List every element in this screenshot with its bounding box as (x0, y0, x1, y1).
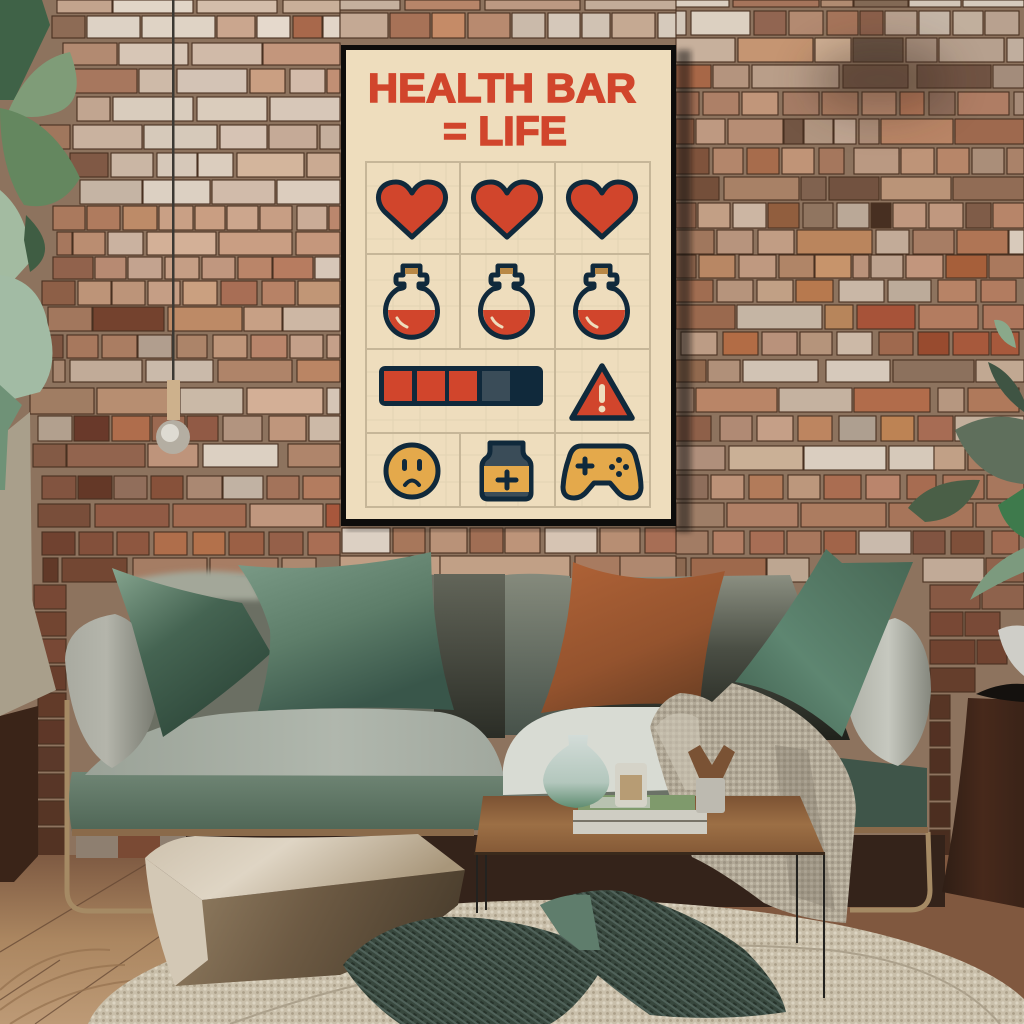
right wooden side table (942, 684, 1024, 908)
left arm (65, 614, 157, 768)
sofa frame (67, 700, 930, 911)
left wooden panel (0, 706, 38, 882)
title (368, 65, 636, 154)
pillow: green large (238, 552, 454, 711)
sofa rail (72, 829, 474, 836)
dark knit floor pillows (343, 890, 786, 1024)
floor (0, 850, 1024, 1024)
back cushions (130, 573, 440, 735)
right arm (846, 618, 931, 766)
icon: heart 2 (473, 182, 541, 237)
vase (543, 735, 609, 808)
round woven rug (88, 900, 1024, 1024)
hanging pendant lamp (156, 0, 190, 454)
pillow: dark green left (112, 568, 271, 737)
poster paper (346, 50, 671, 519)
coffee table (474, 796, 825, 998)
health bar (379, 366, 543, 406)
icon: potion 2 (481, 266, 532, 337)
left seat base (69, 772, 503, 832)
icon: potion 3 (576, 266, 628, 337)
icon: game controller (563, 446, 641, 498)
icon: sad face (386, 445, 438, 497)
knit throw blanket (650, 683, 856, 923)
left plant leaves (0, 0, 80, 490)
right plant (908, 320, 1024, 676)
left curtain (0, 412, 56, 716)
decor on table (543, 735, 735, 834)
icon: medicine bottle (482, 443, 531, 499)
under-sofa shadow (76, 835, 945, 907)
cup with sticks (688, 745, 735, 780)
title: = LIFE (443, 108, 567, 154)
icon grid (366, 162, 650, 507)
icon: warning triangle (572, 366, 632, 418)
candle (615, 763, 647, 807)
icon: potion 1 (386, 266, 438, 337)
pillow: rust brown (541, 562, 725, 713)
right seat cushion (503, 707, 675, 795)
books (573, 810, 707, 834)
pouf (145, 834, 465, 986)
poster frame (341, 45, 676, 526)
sofa (65, 571, 931, 911)
left seat cushion (85, 708, 503, 776)
title: HEALTH BAR (368, 65, 636, 111)
pillow: green right (735, 549, 913, 737)
icon: heart 3 (568, 182, 636, 237)
icon: heart 1 (378, 182, 446, 237)
right seat base (503, 770, 693, 830)
